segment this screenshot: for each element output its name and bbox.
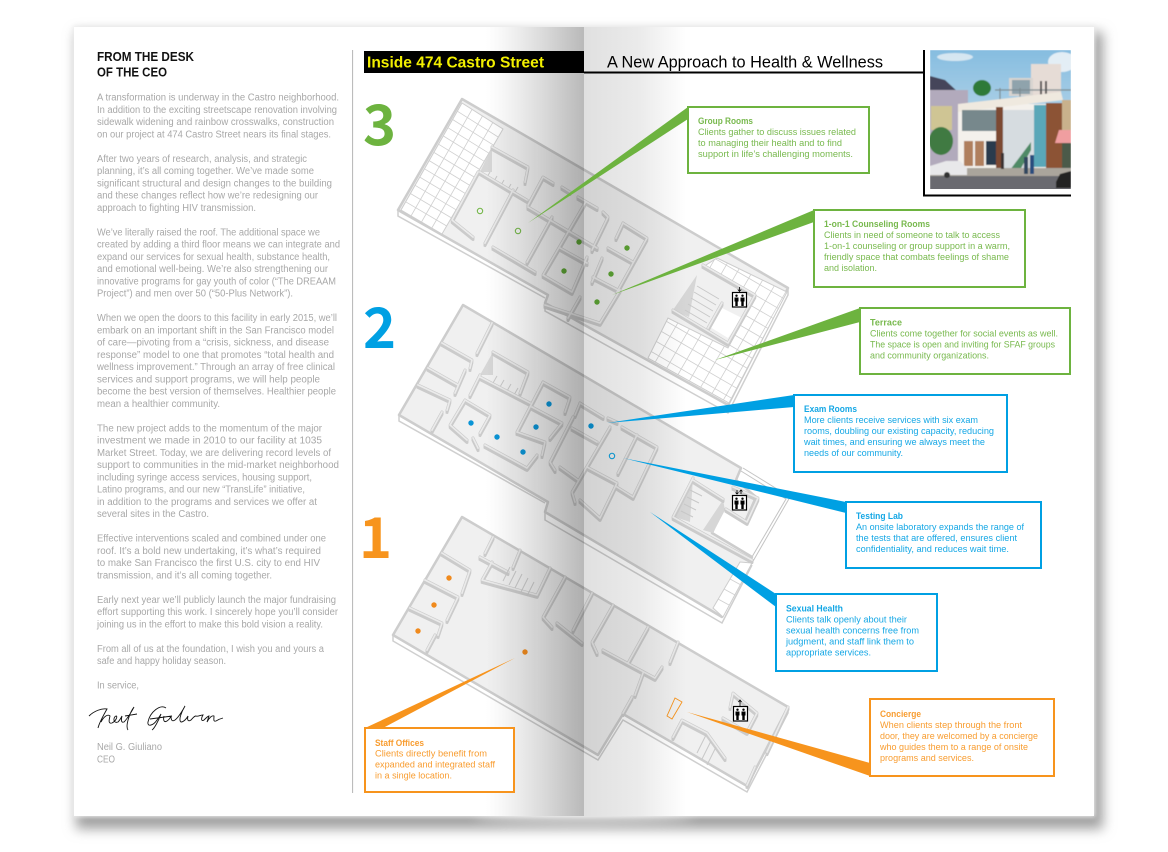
- letter body text: support to communities in the mid-market neighborhood: [97, 460, 339, 471]
- callout: exam rooms: More clients receive services with six exam: [804, 415, 978, 425]
- floor plan 1: [393, 517, 788, 792]
- callout: testing lab: An onsite laboratory expands the range of: [856, 522, 1024, 532]
- header banner: [364, 51, 584, 73]
- callout: concierge: When clients step through the front: [880, 720, 1022, 730]
- callout: counseling rooms: friendly space that combats feelings of shame: [824, 252, 1009, 262]
- callout: counseling rooms: [814, 210, 1025, 287]
- letter body text: several sites in the Castro.: [97, 509, 209, 520]
- dots: exam rooms: [468, 401, 594, 455]
- icon: concierge desk: [667, 698, 682, 719]
- dot: testing lab: [609, 453, 615, 459]
- callout: exam rooms: wait times, and ensuring we always meet the: [803, 437, 985, 447]
- letter body text: investment we made in 2010 to our facility at 1035: [97, 436, 322, 446]
- letter body text: We’ve literally raised the roof. The additional space we: [97, 227, 320, 238]
- callout: terrace: Terrace: [870, 318, 902, 328]
- letter body text: significant structural and design changes to the building: [97, 178, 332, 189]
- callout: exam rooms: needs of our community.: [804, 448, 903, 458]
- callout: sexual health: [776, 594, 937, 671]
- callout: concierge: programs and services.: [880, 753, 974, 763]
- callout: terrace: Clients come together for social events as well.: [870, 328, 1058, 338]
- signatory name: CEO: [97, 754, 115, 766]
- callout: group rooms: to managing their health and to find: [698, 138, 842, 148]
- callout: staff offices: Staff Offices: [375, 738, 424, 748]
- letter body text: including syringe access services, housing support,: [97, 472, 312, 483]
- signature: [89, 706, 223, 730]
- building photo: [929, 50, 1076, 190]
- callout: exam rooms: rooms, doubling our existing capacity, reducing: [804, 426, 994, 436]
- letter body text: Early next year we’ll publicly launch the major fundraising: [97, 595, 336, 606]
- callout: staff offices: Clients directly benefit from: [375, 748, 487, 758]
- letter body text: Project”) and men over 50 (“50-Plus Network”).: [97, 288, 293, 300]
- leader: staff offices: [365, 658, 515, 728]
- callout: staff offices: [365, 728, 514, 792]
- callout: staff offices: expanded and integrated staff: [375, 760, 495, 770]
- letter body text: The new project adds to the momentum of the major: [97, 423, 323, 434]
- leader: counseling rooms: [612, 210, 814, 295]
- letter body text: in addition to the programs and services we offer at: [97, 497, 317, 508]
- letter heading: FROM THE DESK: [97, 49, 195, 64]
- icon: elevator floor 1: [734, 700, 748, 721]
- letter body text: When we open the doors to this facility in early 2015, we’ll: [97, 313, 337, 324]
- CEO letter column: [89, 49, 340, 766]
- letter heading line two: OF THE CEO: [97, 64, 167, 80]
- callout: group rooms: [688, 107, 869, 173]
- spine shading left: [486, 27, 584, 816]
- header subtitle: A New Approach to Health & Wellness: [607, 53, 883, 72]
- letter body text: After two years of research, analysis, and strategic: [97, 154, 307, 165]
- letter body text: created by adding a third floor means we can integrate and: [97, 240, 340, 250]
- callout: terrace: and community organizations.: [870, 350, 989, 360]
- callout: concierge: [870, 699, 1054, 776]
- leader: exam rooms: [607, 395, 794, 423]
- dots: staff offices: [415, 575, 528, 655]
- callout: group rooms: support in life’s challenging moments.: [698, 149, 853, 159]
- icon: elevator floor 3: [732, 287, 746, 307]
- letter body text: on our project at 474 Castro Street nears its final stages.: [97, 129, 331, 140]
- leader: testing lab: [623, 458, 846, 513]
- spine shading right: [584, 27, 686, 816]
- callout: concierge: who guides them to a range of onsite: [879, 742, 1028, 752]
- letter body text: response” model to one that promotes “total health and: [97, 350, 334, 361]
- callout: counseling rooms: 1-on-1 Counseling Rooms: [824, 219, 930, 229]
- letter body text: and emotional well-being. We’re also strengthening our: [97, 264, 329, 275]
- letter body text: Effective interventions scaled and combined under one: [97, 534, 326, 544]
- callout: staff offices: in a single location.: [375, 770, 452, 780]
- callout: sexual health: sexual health concerns free from: [786, 626, 919, 636]
- letter body text: From all of us at the foundation, I wish you and yours a: [97, 644, 324, 655]
- callout: concierge: Concierge: [880, 709, 921, 719]
- dots: counseling rooms: [561, 239, 630, 305]
- letter body text: of care—pivoting from a “crisis, sickness, and disease: [97, 338, 329, 348]
- letter body text: effort supporting this work. I sincerely hope you’ll consider: [97, 607, 339, 618]
- floor plan 2: [399, 305, 790, 623]
- letter body text: transmission, and it’s all coming together.: [97, 570, 272, 581]
- signatory name: [97, 742, 162, 766]
- callout: testing lab: Testing Lab: [856, 511, 903, 521]
- callout: counseling rooms: 1-on-1 counseling or group support in a warm,: [824, 241, 1010, 251]
- callout: testing lab: the tests that are offered, ensures client: [856, 533, 1017, 543]
- callout: terrace: [860, 308, 1070, 374]
- callout: sexual health: Sexual Health: [786, 604, 843, 614]
- number 2: 2: [363, 284, 396, 365]
- letter body text: and these changes reflect how we’re redesigning our: [97, 190, 319, 202]
- callout: concierge: door, they are welcomed by a concierge: [880, 731, 1038, 741]
- callout: exam rooms: Exam Rooms: [804, 404, 857, 414]
- letter body text: sidewalk widening and rainbow crosswalks, construction: [97, 117, 334, 128]
- letter body text: Market Street. Today, we are delivering record levels of: [97, 448, 331, 459]
- dots: group rooms: [477, 208, 521, 234]
- letter body text: expand our services for sexual health, substance health,: [97, 252, 330, 263]
- letter body text: In service,: [97, 680, 139, 692]
- callout: sexual health: Clients talk openly about their: [786, 614, 907, 624]
- letter body text: Latino programs, and our new “TransLife” initiative,: [97, 484, 305, 496]
- icon: elevator floor 2: [732, 490, 746, 510]
- letter body text: joining us in the effort to make this bold vision a reality.: [96, 619, 323, 630]
- number 1: 1: [359, 494, 392, 575]
- callout: exam rooms: [794, 395, 1007, 472]
- leader: group rooms: [528, 107, 688, 223]
- letter body text: [96, 92, 340, 692]
- letter body text: embark on an important shift in the San Francisco model: [97, 325, 334, 336]
- leader: concierge: [687, 712, 870, 776]
- letter body text: A transformation is underway in the Castro neighborhood.: [97, 92, 339, 104]
- callout: counseling rooms: and isolation.: [824, 263, 877, 273]
- letter body text: approach to fighting HIV transmission.: [97, 203, 256, 214]
- signatory name: Neil G. Giuliano: [97, 742, 162, 753]
- callout: group rooms: Group Rooms: [698, 116, 753, 126]
- letter body text: planning, it’s all coming together. We’ve made some: [97, 166, 314, 177]
- letter body text: to make San Francisco the first U.S. city to end HIV: [97, 558, 320, 569]
- leader: terrace: [715, 308, 860, 360]
- callout: counseling rooms: Clients in need of someone to talk to access: [824, 230, 1000, 240]
- letter body text: In addition to the exciting streetscape renovation involving: [97, 105, 337, 116]
- leader: sexual health: [650, 512, 776, 607]
- number 3: 3: [363, 81, 396, 162]
- letter body text: safe and happy holiday season.: [97, 656, 226, 667]
- callout: testing lab: confidentiality, and reduces wait time.: [856, 544, 1009, 554]
- callout: sexual health: appropriate services.: [786, 648, 871, 658]
- letter body text: wellness improvement.” Through an array of free clinical: [96, 362, 335, 373]
- callout: terrace: The space is open and inviting for SFAF groups: [870, 340, 1055, 350]
- letter body text: services and support programs, we will help people: [97, 374, 320, 385]
- letter body text: mean a healthier community.: [97, 399, 220, 410]
- callout: group rooms: Clients gather to discuss issues related: [698, 127, 856, 137]
- letter body text: innovative programs for gay youth of color (“The DREAAM: [97, 276, 336, 287]
- floor plan 3: [396, 98, 790, 414]
- letter body text: roof. It’s a bold new undertaking, it’s what’s required: [97, 546, 321, 557]
- callout: sexual health: judgment, and staff link them to: [785, 636, 914, 646]
- callout: testing lab: [846, 502, 1041, 568]
- banner title: Inside 474 Castro Street: [367, 54, 545, 72]
- letter body text: become the best version of themselves. Healthier people: [97, 386, 336, 398]
